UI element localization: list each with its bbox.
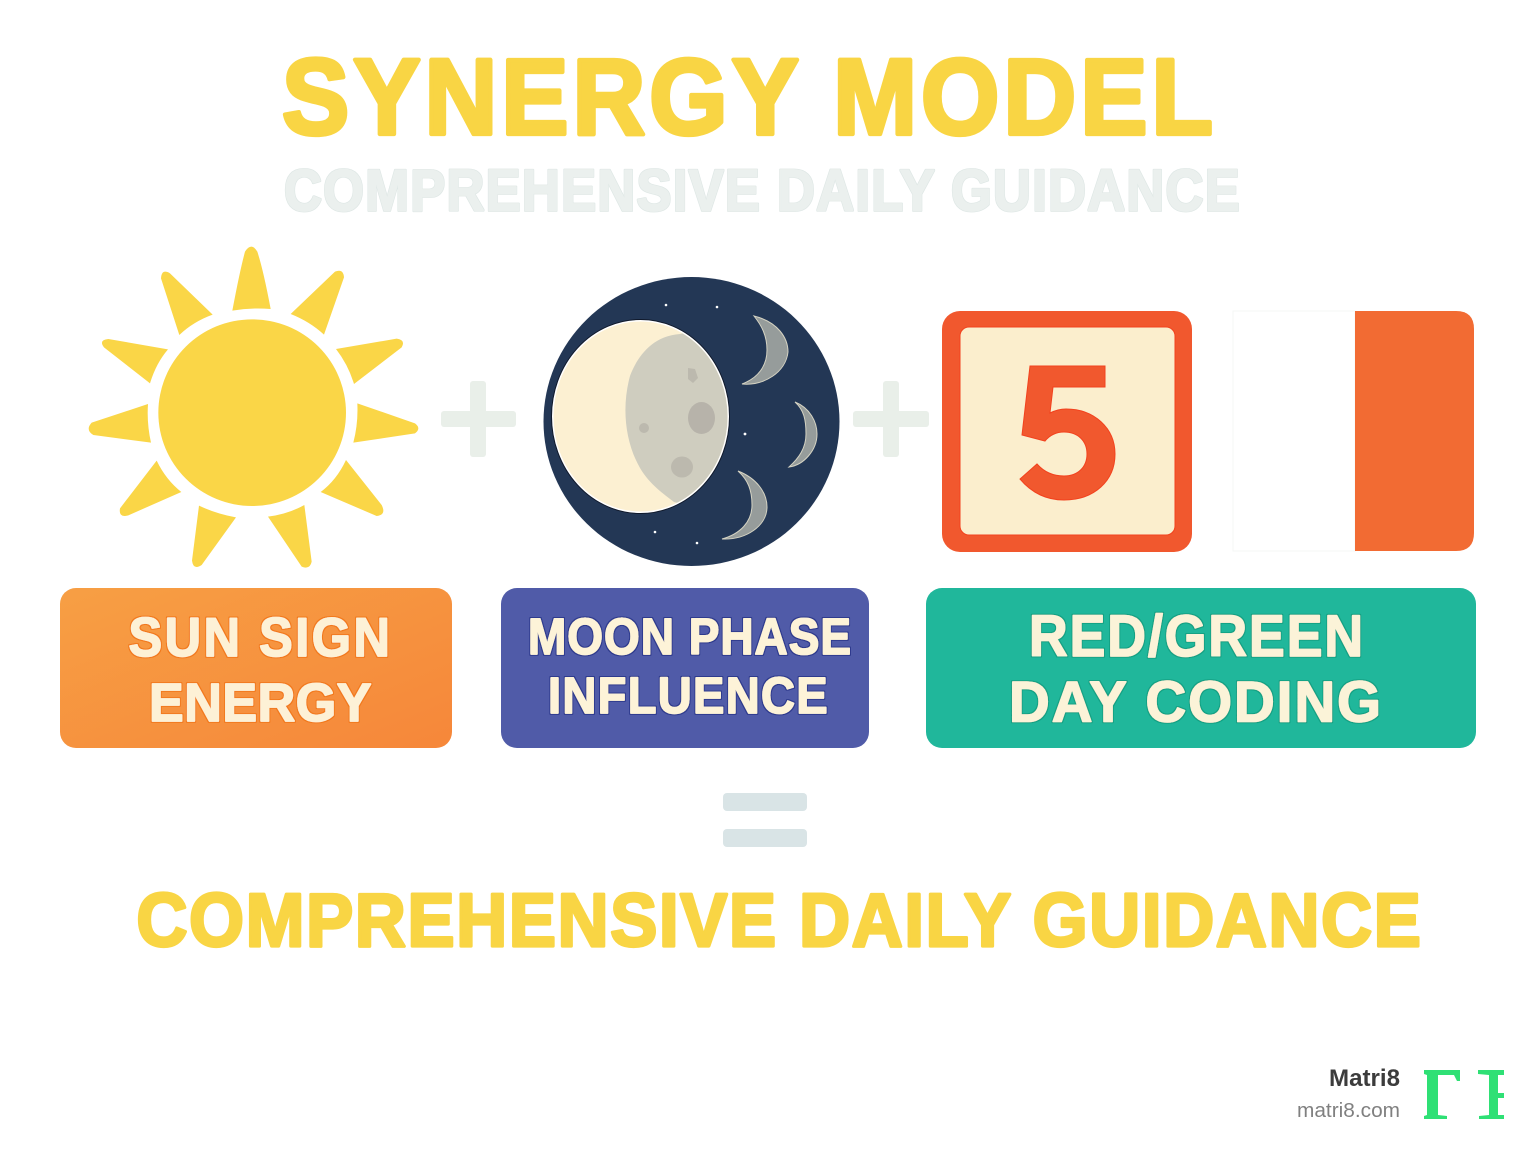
footer brand text: matri8.com <box>1297 1100 1400 1122</box>
panel: red/green day coding: RED/GREEN <box>1029 603 1365 669</box>
panel: moon phase influence: MOON PHASE <box>528 609 852 666</box>
footer logo glyphs <box>1424 1070 1504 1119</box>
plus sign 2 <box>853 381 929 457</box>
icon: moon phases <box>544 277 840 566</box>
icon: red green day coding card <box>1233 311 1474 551</box>
panel: sun sign energy: SUN SIGN <box>128 607 392 669</box>
result heading: COMPREHENSIVE DAILY GUIDANCE <box>136 879 1422 963</box>
panel: red/green day coding: DAY CODING <box>1009 669 1383 734</box>
equals sign <box>723 793 807 847</box>
panel: sun sign energy: ENERGY <box>149 672 372 733</box>
panel: red/green day coding <box>926 588 1476 748</box>
subtitle: COMPREHENSIVE DAILY GUIDANCE <box>284 158 1241 223</box>
plus sign 1 <box>441 381 516 457</box>
panel: sun sign energy <box>60 588 452 748</box>
icon: sun <box>89 247 418 568</box>
title: SYNERGY MODEL <box>282 37 1217 158</box>
panel: moon phase influence: INFLUENCE <box>548 667 829 724</box>
footer brand text <box>1297 1065 1400 1122</box>
panel: moon phase influence <box>501 588 869 748</box>
footer brand text: Matri8 <box>1329 1065 1400 1092</box>
icon: calendar day 5 <box>942 311 1192 552</box>
